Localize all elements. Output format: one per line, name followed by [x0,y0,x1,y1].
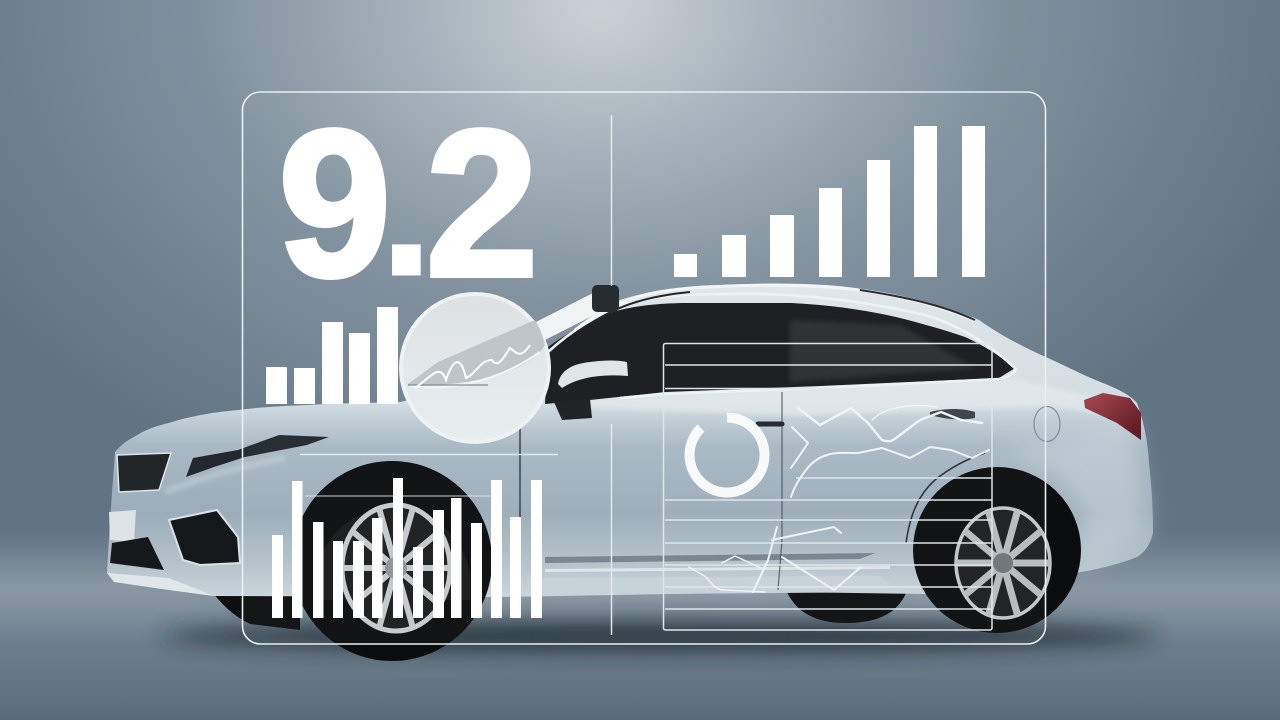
door seams and handles [520,392,985,590]
line chart scribbles [689,406,989,592]
lower bar chart [272,478,542,618]
magnifying glass lens [401,294,549,442]
lower grille [110,537,164,570]
small bar chart [266,307,398,404]
car shadow [160,621,1160,651]
rear quarter light [1000,420,1150,570]
interior tint [790,320,975,382]
front grille [117,453,171,492]
car body [107,284,1153,597]
car [107,284,1153,661]
magnifier handle [530,285,619,340]
far-side wheels and underbody [212,588,908,630]
score number: 9 [278,87,391,320]
bumper lip [107,573,214,596]
donut chart [690,418,765,492]
headlight [186,435,329,477]
inner data table [664,344,992,630]
side mirror [554,359,628,420]
panel divider lines [300,115,612,635]
fuel door [1034,406,1060,442]
side sill [530,553,900,595]
rising bar chart top right [674,126,985,277]
window trim [548,285,1016,398]
dashboard panel frame [242,92,1046,644]
windows [545,303,1015,404]
front wheel [292,461,492,661]
bumper crease [165,458,285,492]
shoulder highlight [590,378,1140,425]
fog lamp [169,510,240,565]
tail light [1084,393,1141,440]
score number: 2 [426,87,538,320]
number plate [109,510,136,542]
score number: . [378,87,435,320]
rear wheel [913,467,1081,633]
